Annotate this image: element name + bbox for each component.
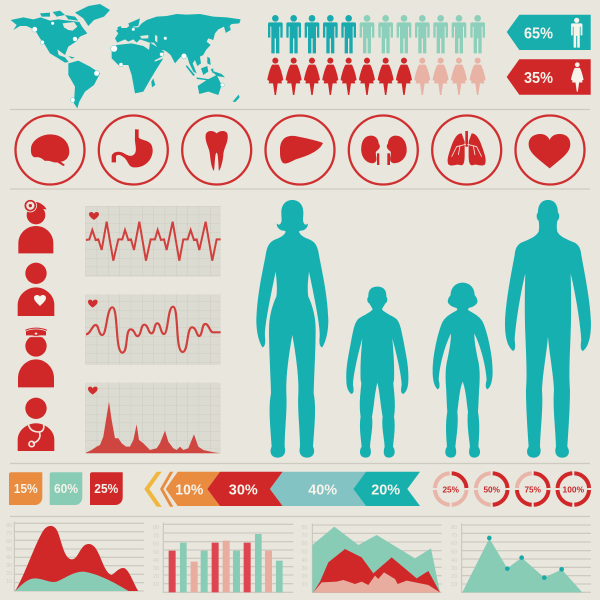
medical staff icons <box>18 199 54 451</box>
chart: layered area chart: 10 <box>301 582 308 588</box>
chart: layered area chart: 50 <box>301 550 308 556</box>
arrow: orange chevron <box>160 472 173 507</box>
organ icons row <box>16 116 584 184</box>
tag: 65% men <box>507 15 591 50</box>
map: Arabia <box>149 43 164 61</box>
map: Greenland <box>75 4 110 26</box>
chart: layered area chart: 60 <box>301 541 308 547</box>
monitor: ECG line <box>85 206 221 277</box>
arrow: 30% <box>207 472 283 506</box>
arrow: yellow chevron <box>144 472 162 507</box>
chart: area chart red and mint: 50 <box>6 547 12 553</box>
map: Eurasia <box>115 14 241 73</box>
chart: area chart with dots <box>451 523 591 593</box>
chart: bar chart: 80 <box>153 525 159 531</box>
chart: bar chart: 10 <box>153 582 159 588</box>
donut: 50% <box>476 473 508 505</box>
badge: 15%: 15% <box>14 481 38 496</box>
icon: medic with heart <box>18 263 54 316</box>
chart: layered area chart: 80 <box>301 525 308 531</box>
donut: 75% <box>517 473 548 505</box>
tag: 65% men: 65% <box>524 26 553 42</box>
arrow: 10%: 10% <box>175 482 203 499</box>
human body silhouettes <box>256 200 591 458</box>
men row <box>268 15 485 53</box>
silhouette: girl <box>433 283 493 458</box>
chart: bar chart: 40 <box>153 558 159 564</box>
icon: brain <box>16 116 84 184</box>
map: North America <box>11 17 87 63</box>
monitor: spectrum area <box>85 383 221 453</box>
map: Africa <box>112 43 163 93</box>
chart: area chart with dots: 10 <box>451 582 457 588</box>
chart: layered area chart: 70 <box>301 533 308 539</box>
icon: doctor with stethoscope <box>18 398 54 451</box>
chart: area chart red and mint: 80 <box>6 523 12 529</box>
badge: 25%: 25% <box>94 481 119 496</box>
silhouette: boy <box>346 287 408 458</box>
chart: area chart with dots: 20 <box>451 574 457 580</box>
pictogram rows: men and women <box>267 15 486 95</box>
map: Australia <box>198 75 222 95</box>
map: Black Sea and Caspian Sea <box>140 35 157 43</box>
icon: liver <box>266 116 334 184</box>
arrow: 40%: 40% <box>308 482 337 499</box>
silhouette: woman <box>256 200 328 458</box>
arrow: 10% <box>166 472 220 506</box>
chart: area chart with dots: 80 <box>451 525 457 531</box>
badge: 25% <box>90 472 123 505</box>
icon: nurse <box>18 328 54 387</box>
monitor: smooth wave <box>85 294 221 365</box>
donut: 25%: 25% <box>442 484 459 494</box>
chart: bar chart <box>153 522 293 593</box>
map: UK <box>117 26 123 32</box>
chart: layered area chart: 20 <box>301 574 308 580</box>
chart: area chart with dots: 30 <box>451 566 457 572</box>
chart: bar chart: 60 <box>153 542 159 548</box>
arrow chain <box>144 472 420 507</box>
chart: area chart with dots: 50 <box>451 550 457 556</box>
map: New Zealand <box>233 95 240 102</box>
icon: lungs <box>432 116 501 184</box>
map: New Guinea <box>212 71 225 77</box>
donut: 100% <box>558 473 589 505</box>
arrow: 40% <box>270 472 366 506</box>
icon: stomach <box>99 116 168 184</box>
donut: 50%: 50% <box>483 484 500 494</box>
icon: tooth <box>182 116 251 184</box>
map: Hudson Bay <box>63 22 77 31</box>
world map <box>11 4 241 108</box>
icon: doctor with head mirror <box>18 199 53 253</box>
map: Canadian Arctic islands <box>40 11 78 21</box>
map: Scandinavia <box>128 18 140 28</box>
chart: area chart red and mint: 60 <box>6 539 12 545</box>
badge: 15% <box>9 472 42 505</box>
map: Madagascar <box>151 78 155 87</box>
chart: layered area chart <box>301 523 442 593</box>
donut: 25% <box>435 473 467 505</box>
donut: 100%: 100% <box>563 484 584 494</box>
chart: area chart red and mint: 20 <box>6 571 12 577</box>
women row <box>267 58 486 95</box>
arrow: 20%: 20% <box>371 482 400 499</box>
chart: bar chart: 50 <box>153 550 159 556</box>
chart: area chart red and mint: 30 <box>6 563 12 569</box>
arrow: 30%: 30% <box>229 482 258 499</box>
badge: 60% <box>50 472 82 505</box>
chart: bar chart: 30 <box>153 566 159 572</box>
icon: kidneys <box>349 116 418 184</box>
map: South America <box>68 61 100 108</box>
tag: 35% women: 35% <box>524 70 553 87</box>
map: Indonesia and Philippines <box>186 57 213 81</box>
map: Japan <box>225 26 231 32</box>
chart: area chart red and mint: 70 <box>6 531 12 537</box>
chart: area chart with dots: 60 <box>451 541 457 547</box>
map: location dots <box>32 22 224 102</box>
chart: area chart red and mint <box>6 522 144 592</box>
map: Cuba <box>68 56 75 59</box>
ECG monitors <box>85 206 221 453</box>
chart: bar chart: 70 <box>153 534 159 540</box>
chart: bar chart: 20 <box>153 574 159 580</box>
icon: heart <box>516 116 584 184</box>
chart: area chart with dots: 40 <box>451 558 457 564</box>
chart: layered area chart: 30 <box>301 566 308 572</box>
chart: area chart with dots: 70 <box>451 533 457 539</box>
badge: 60%: 60% <box>54 481 78 496</box>
arrow: 20% <box>353 472 420 506</box>
silhouette: man <box>505 200 591 458</box>
chart: layered area chart: 40 <box>301 558 308 564</box>
chart: area chart red and mint: 10 <box>6 579 12 585</box>
chart: area chart red and mint: 40 <box>6 555 12 561</box>
tag: 35% women <box>507 59 591 95</box>
donut: 75%: 75% <box>524 484 541 494</box>
